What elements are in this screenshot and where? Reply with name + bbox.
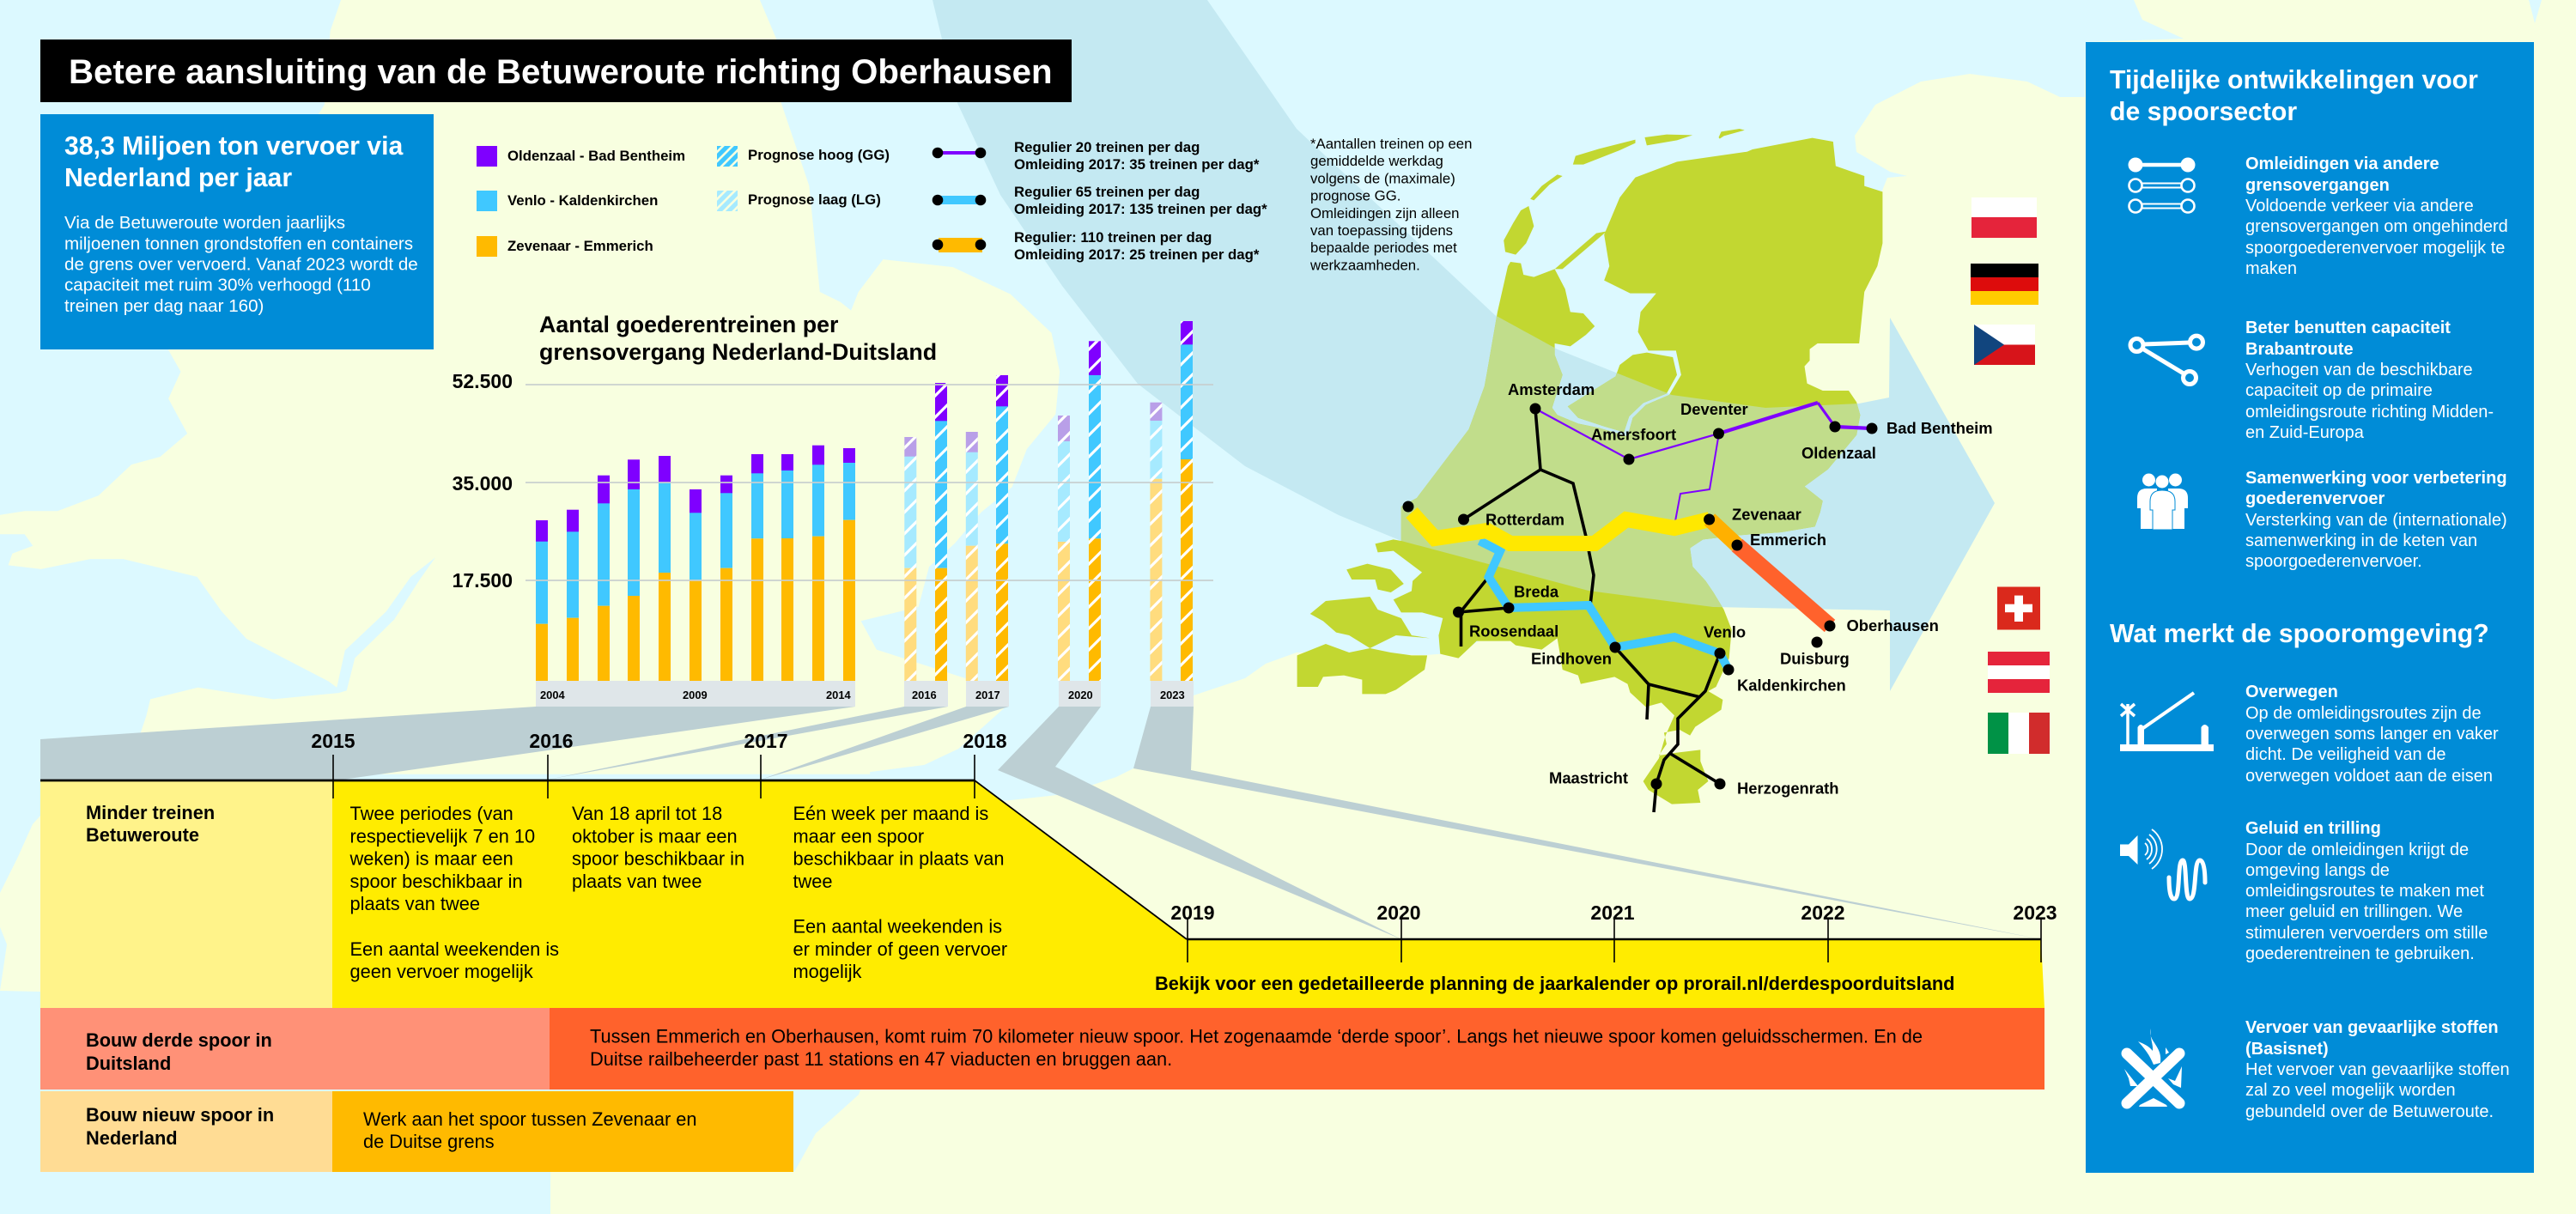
flag: Poland xyxy=(1971,197,2037,238)
footnote: *Aantallen treinen op een xyxy=(1310,136,1472,152)
map: place names: Duisburg xyxy=(1780,649,1850,668)
timeline panel: Bouw derde spoor in Duitsland: Duitsland xyxy=(86,1053,171,1074)
legend: route line widths: Omleiding 2017: 135 treinen per dag* xyxy=(1014,201,1267,217)
text: 2015: spoor beschikbaar in xyxy=(350,871,523,892)
timeline axis: 2022 xyxy=(1801,901,1845,924)
map: place names: Amsterdam xyxy=(1508,380,1595,398)
flag: Czech Republic xyxy=(1974,325,2035,365)
text: Brabantroute: Brabantroute xyxy=(2245,340,2354,359)
panel text: Via de Betuweroute worden jaarlijks xyxy=(64,213,345,233)
map: place names xyxy=(1469,380,1993,797)
panel heading: Nederland per jaar xyxy=(64,164,292,192)
legend: border crossings and prognoses: Venlo - Kaldenkirchen xyxy=(507,192,658,209)
timeline axis: 2021 xyxy=(1590,901,1635,924)
text: Geluid en trilling: omleidingsroutes te maken met xyxy=(2245,882,2484,901)
text: Omleidingen: Omleidingen via andere xyxy=(2245,155,2439,173)
timeline panel: Bouw derde spoor in Duitsland: Duitse railbeheerder past 11 stations en 47 viaducten en bruggen aan. xyxy=(590,1048,1172,1070)
year labels: 2016 xyxy=(912,689,937,701)
text: Geluid en trilling: stimuleren vervoerders om stille xyxy=(2245,924,2488,943)
legend: route line widths: Regulier 65 treinen per dag xyxy=(1014,184,1200,200)
flag: Austria xyxy=(1988,652,2050,693)
year labels xyxy=(540,689,1185,701)
text: Brabantroute: en Zuid-Europa xyxy=(2245,423,2365,442)
footnote: gemiddelde werkdag xyxy=(1310,153,1443,169)
timeline panel: Bouw nieuw spoor in Nederland: Nederland xyxy=(86,1127,178,1149)
chart title: grensovergang Nederland-Duitsland xyxy=(539,339,937,365)
text: 2017: Een aantal weekenden is xyxy=(793,915,1002,938)
text: 2017: beschikbaar in plaats van xyxy=(793,848,1004,870)
icon: sound and vibration xyxy=(2120,829,2205,899)
timeline panel: Bouw derde spoor in Duitsland xyxy=(40,1008,2044,1090)
panel text: de grens over vervoerd. Vanaf 2023 wordt de xyxy=(64,254,418,275)
timeline axis: 2018 xyxy=(963,730,1007,752)
heading: Wat merkt de spooromgeving: Wat merkt de spooromgeving? xyxy=(2110,620,2489,648)
text: 2016: oktober is maar een xyxy=(572,825,738,847)
timeline axis xyxy=(40,730,2057,962)
map: place names: Roosendaal xyxy=(1469,622,1558,640)
footnote: werkzaamheden. xyxy=(1309,257,1420,273)
text: Samenwerking: Versterking van de (internationale) xyxy=(2245,511,2507,530)
timeline axis: 2016 xyxy=(529,730,574,752)
timeline panel: Bouw derde spoor in Duitsland: Tussen Emmerich en Oberhausen, komt ruim 70 kilometer nieuw spoor. Het zogenaamde ‘derde spoor’. Langs het nieuwe spoor komen geluidsschermen. En de xyxy=(590,1025,1923,1047)
timeline panel: Minder treinen Betuweroute xyxy=(40,780,2044,1008)
text: Overwegen: overwegen voldoet aan de eisen xyxy=(2245,767,2493,786)
text: 2015: geen vervoer mogelijk xyxy=(350,961,533,982)
text: Vervoer gevaarlijke stoffen: (Basisnet) xyxy=(2245,1040,2329,1059)
text: 2016: spoor beschikbaar in xyxy=(572,848,744,870)
icon: level crossing xyxy=(2120,693,2214,751)
text: Geluid en trilling: meer geluid en trillingen. We xyxy=(2245,902,2463,921)
timeline panel: Bouw nieuw spoor in Nederland: Werk aan het spoor tussen Zevenaar en xyxy=(363,1108,697,1130)
row heading: Minder treinen xyxy=(86,802,215,823)
title xyxy=(40,39,1072,102)
text: Brabantroute: Verhogen van de beschikbare xyxy=(2245,361,2473,379)
timeline panel: Bouw derde spoor in Duitsland: Bouw derde spoor in xyxy=(86,1029,272,1051)
route: third track xyxy=(1737,545,1830,626)
legend: border crossings and prognoses: Zevenaar - Emmerich xyxy=(507,238,653,254)
text: Brabantroute: omleidingsroute richting Midden- xyxy=(2245,403,2494,422)
background: land bottom left xyxy=(0,816,40,992)
icon: three routes xyxy=(2129,158,2195,213)
panel: right column xyxy=(2086,42,2534,1173)
text: Vervoer gevaarlijke stoffen: zal zo veel mogelijk worden xyxy=(2245,1081,2456,1100)
flag: Italy xyxy=(1988,713,2050,754)
panel: 38,3 miljoen ton xyxy=(40,114,434,349)
map: station dots xyxy=(1403,404,1877,790)
timeline axis: 2015 xyxy=(311,730,355,752)
background: land west xyxy=(0,0,1060,774)
connector wedges from chart to timeline xyxy=(40,707,2041,939)
text: Omleidingen: grensovergangen om ongehinderd xyxy=(2245,217,2508,236)
historic bars 2004-2014 xyxy=(536,446,855,681)
route: yellow Betuweroute xyxy=(1412,513,1710,543)
map: place names: Herzogenrath xyxy=(1737,780,1839,797)
timeline panel: Bouw nieuw spoor in Nederland xyxy=(40,1091,793,1172)
map: place names: Oberhausen xyxy=(1846,616,1939,634)
legend: border crossings and prognoses: Prognose laag (LG) xyxy=(748,191,881,208)
timeline axis: 2023 xyxy=(2013,901,2057,924)
panel text: treinen per dag naar 160) xyxy=(64,296,264,316)
text: Geluid en trilling: omgeving langs de xyxy=(2245,861,2390,880)
route: blue diversion xyxy=(1479,541,1728,670)
text: Vervoer gevaarlijke stoffen: Vervoer van gevaarlijke stoffen xyxy=(2245,1018,2499,1037)
footnote: Omleidingen zijn alleen xyxy=(1310,205,1460,222)
legend: route line widths: Regulier 20 treinen per dag xyxy=(1014,139,1200,155)
text: Geluid en trilling: Door de omleidingen krijgt de xyxy=(2245,841,2469,859)
flag: Switzerland xyxy=(1997,587,2040,630)
link text: Bekijk voor een gedetailleerde planning de jaarkalender op prorail.nl/derdespoorduitsland xyxy=(1155,973,1954,994)
panel text: capaciteit met ruim 30% verhoogd (110 xyxy=(64,276,371,295)
heading: Tijdelijke ontwikkelingen: de spoorsector xyxy=(2110,98,2297,126)
icon: three people xyxy=(2137,474,2188,530)
text: Vervoer gevaarlijke stoffen: gebundeld over de Betuweroute. xyxy=(2245,1102,2494,1121)
map: place names: Maastricht xyxy=(1549,769,1628,786)
legend: border crossings and prognoses: Oldenzaal - Bad Bentheim xyxy=(507,148,685,164)
text: 2017: maar een spoor xyxy=(793,825,924,847)
legend: route line widths: Omleiding 2017: 25 treinen per dag* xyxy=(1014,246,1260,263)
text: Samenwerking: spoorgoederenvervoer. xyxy=(2245,552,2422,571)
text: Overwegen: Overwegen xyxy=(2245,683,2338,701)
text: Vervoer gevaarlijke stoffen: Het vervoer van gevaarlijke stoffen xyxy=(2245,1060,2510,1079)
text: Geluid en trilling: goederentreinen te gebruiken. xyxy=(2245,944,2475,963)
panel text: miljoenen tonnen grondstoffen en containers xyxy=(64,234,413,253)
legend: route line widths xyxy=(933,139,1267,263)
chart title: Aantal goederentreinen per xyxy=(539,312,839,337)
map: place names: Oldenzaal xyxy=(1801,444,1876,462)
footnote: prognose GG. xyxy=(1310,188,1400,204)
text: Overwegen: dicht. De veiligheid van de xyxy=(2245,745,2445,764)
icon: branching route xyxy=(2130,336,2203,385)
text: 2016: Van 18 april tot 18 xyxy=(572,803,722,824)
map: place names: Amersfoort xyxy=(1591,426,1676,443)
y axis labels: 52.500 xyxy=(453,370,513,392)
map: place names: Deventer xyxy=(1680,400,1748,418)
map: place names: Rotterdam xyxy=(1485,510,1564,529)
legend: route line widths: Regulier: 110 treinen per dag xyxy=(1014,229,1212,246)
y axis labels xyxy=(453,370,513,592)
map: place names: Bad Bentheim xyxy=(1886,419,1993,437)
text: Brabantroute: Beter benutten capaciteit xyxy=(2245,319,2451,337)
text: Samenwerking: samenwerking in de keten van xyxy=(2245,531,2477,550)
panel heading: 38,3 Miljoen ton vervoer via xyxy=(64,132,403,161)
text: Omleidingen: spoorgoederenvervoer mogelijk te xyxy=(2245,239,2505,258)
route: black network xyxy=(1458,409,1720,812)
text: 2015: Een aantal weekenden is xyxy=(350,938,559,960)
text: 2015: Twee periodes (van xyxy=(350,803,513,824)
map: place names: Zevenaar xyxy=(1732,505,1801,524)
year labels: 2004 xyxy=(540,689,566,701)
legend: border crossings and prognoses xyxy=(477,146,890,257)
text: 2016: plaats van twee xyxy=(572,871,702,892)
year labels: 2017 xyxy=(975,689,1000,701)
flag: Germany xyxy=(1971,264,2038,305)
prognosis bars xyxy=(904,321,1193,681)
text: Geluid en trilling: Geluid en trilling xyxy=(2245,819,2381,838)
year labels: 2020 xyxy=(1068,689,1093,701)
year bands xyxy=(536,681,1194,707)
footnote: volgens de (maximale) xyxy=(1310,170,1455,186)
map: rail routes xyxy=(1412,403,1872,812)
text: Samenwerking: Samenwerking voor verbetering xyxy=(2245,469,2507,488)
timeline axis: 2017 xyxy=(744,730,788,752)
heading: Tijdelijke ontwikkelingen: Tijdelijke ontwikkelingen voor xyxy=(2110,66,2478,94)
title: Betere aansluiting van de Betuweroute richting Oberhausen xyxy=(69,52,1053,91)
timeline panel: Bouw nieuw spoor in Nederland: de Duitse grens xyxy=(363,1131,495,1152)
map: place names: Venlo xyxy=(1704,623,1746,640)
text: 2015: weken) is maar een xyxy=(349,848,513,870)
map: place names: Emmerich xyxy=(1750,531,1826,549)
footnote: van toepassing tijdens xyxy=(1310,222,1453,239)
text: Overwegen: Op de omleidingsroutes zijn de xyxy=(2245,704,2482,723)
map: Netherlands xyxy=(1297,129,1882,804)
map: place names: Breda xyxy=(1514,582,1559,601)
y axis labels: 17.500 xyxy=(453,569,513,592)
year labels: 2009 xyxy=(683,689,708,701)
text: Samenwerking: goederenvervoer xyxy=(2245,489,2385,508)
text: Omleidingen: maken xyxy=(2245,259,2297,278)
bar chart: goods trains per border crossing xyxy=(453,321,1213,707)
text: Brabantroute: capaciteit op de primaire xyxy=(2245,381,2433,400)
text: 2017: mogelijk xyxy=(793,961,862,982)
text: 2017: Eén week per maand is xyxy=(793,803,988,824)
year labels: 2023 xyxy=(1160,689,1185,701)
legend: route line widths: Omleiding 2017: 35 treinen per dag* xyxy=(1014,156,1260,173)
route: orange xyxy=(1710,519,1737,545)
timeline axis: 2019 xyxy=(1170,901,1215,924)
timeline axis: 2020 xyxy=(1376,901,1421,924)
text: 2015: respectievelijk 7 en 10 xyxy=(350,825,535,847)
map: place names: Kaldenkirchen xyxy=(1737,677,1846,694)
y axis labels: 35.000 xyxy=(453,472,513,495)
map: place names: Eindhoven xyxy=(1531,649,1612,668)
legend: border crossings and prognoses: Prognose hoog (GG) xyxy=(748,147,890,163)
text: 2015: plaats van twee xyxy=(350,893,480,914)
text: Overwegen: overwegen soms langer en vaker xyxy=(2245,725,2499,744)
text: 2017: er minder of geen vervoer xyxy=(793,938,1007,960)
footnote: bepaalde periodes met xyxy=(1310,240,1457,256)
text: Omleidingen: grensovergangen xyxy=(2245,176,2390,195)
text: 2017: twee xyxy=(793,871,833,892)
icon: hazardous goods xyxy=(2124,1029,2182,1107)
row heading: Betuweroute xyxy=(86,824,199,846)
year labels: 2014 xyxy=(826,689,852,701)
text: Omleidingen: Voldoende verkeer via andere xyxy=(2245,197,2474,215)
background: land south and east xyxy=(550,0,2576,1214)
background: arrow towards Germany xyxy=(933,0,1995,691)
timeline panel: Bouw nieuw spoor in Nederland: Bouw nieuw spoor in xyxy=(86,1104,274,1126)
route: purple diversion xyxy=(1535,403,1872,521)
